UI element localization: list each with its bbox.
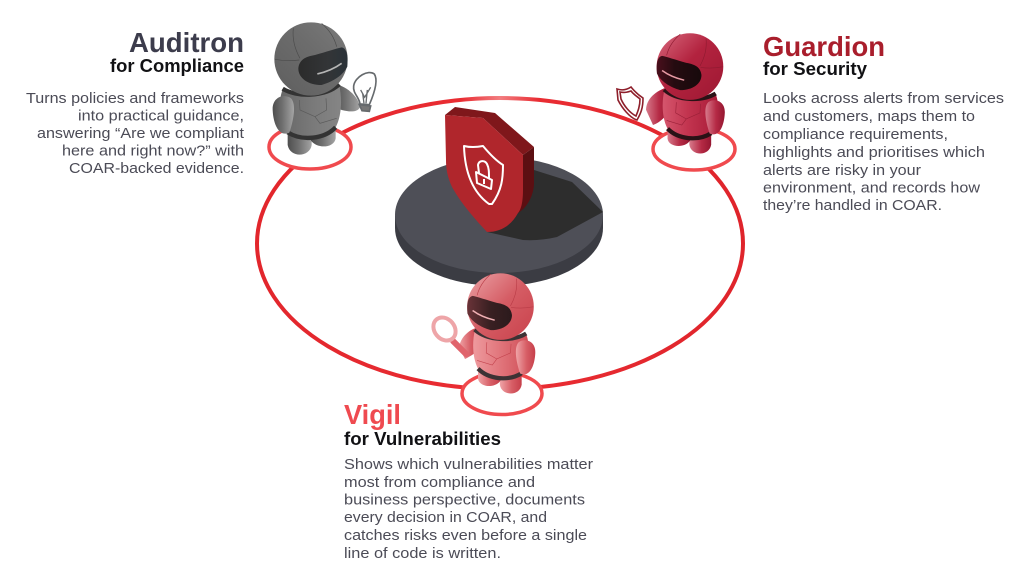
Guardion base ring [653, 128, 735, 170]
description: Vigil: most from compliance and [344, 474, 535, 491]
description: Auditron: COAR-backed evidence. [69, 160, 244, 177]
heading: Vigil: Vigil [344, 399, 401, 430]
description: Guardion: Looks across alerts from services [763, 90, 1004, 107]
description: Vigil [344, 456, 593, 562]
icon: light bulb [354, 73, 376, 111]
robot: Auditron [273, 22, 376, 155]
Auditron base ring [269, 125, 351, 169]
description: Auditron: here and right now?” with [62, 142, 244, 160]
robot: Guardion [646, 33, 725, 153]
text block: Vigil [344, 399, 593, 562]
description: Guardion: alerts are risky in your [763, 162, 921, 179]
description: Auditron [26, 90, 245, 177]
icon: magnifying glass [429, 313, 466, 354]
subheading: for Compliance: for Compliance [110, 56, 244, 76]
description: Auditron: Turns policies and frameworks [26, 90, 244, 107]
icon: padlock shield outline [464, 146, 503, 204]
robot: Vigil [459, 273, 535, 393]
description: Vigil: business perspective, documents [344, 492, 585, 508]
description: Guardion: highlights and prioritises which [763, 144, 985, 161]
central shield with padlock [445, 107, 534, 232]
description: Vigil: every decision in COAR, and [344, 509, 547, 526]
description: Guardion: compliance requirements, [763, 126, 948, 143]
description: Vigil: catches risks even before a single [344, 527, 587, 544]
icon: outlined shield [617, 87, 643, 120]
description: Guardion: they’re handled in COAR. [763, 197, 942, 214]
description: Guardion: environment, and records how [763, 180, 980, 196]
subheading: for Security: for Security [763, 59, 867, 79]
large red orbit ring [257, 98, 743, 389]
heading: Auditron: Auditron [129, 27, 244, 58]
Vigil base ring [462, 372, 542, 414]
description: Guardion [763, 90, 1004, 214]
description: Auditron: answering “Are we compliant [37, 125, 245, 142]
subheading: for Vulnerabilities: for Vulnerabilities [344, 429, 501, 449]
heading: Guardion: Guardion [763, 31, 885, 62]
text block: Auditron [26, 27, 245, 177]
description: Auditron: into practical guidance, [78, 108, 244, 124]
description: Vigil: line of code is written. [344, 545, 501, 562]
description: Guardion: and customers, maps them to [763, 108, 975, 125]
central platform disc [395, 157, 603, 286]
description: Vigil: Shows which vulnerabilities matter [344, 456, 593, 473]
text block: Guardion [763, 31, 1004, 214]
